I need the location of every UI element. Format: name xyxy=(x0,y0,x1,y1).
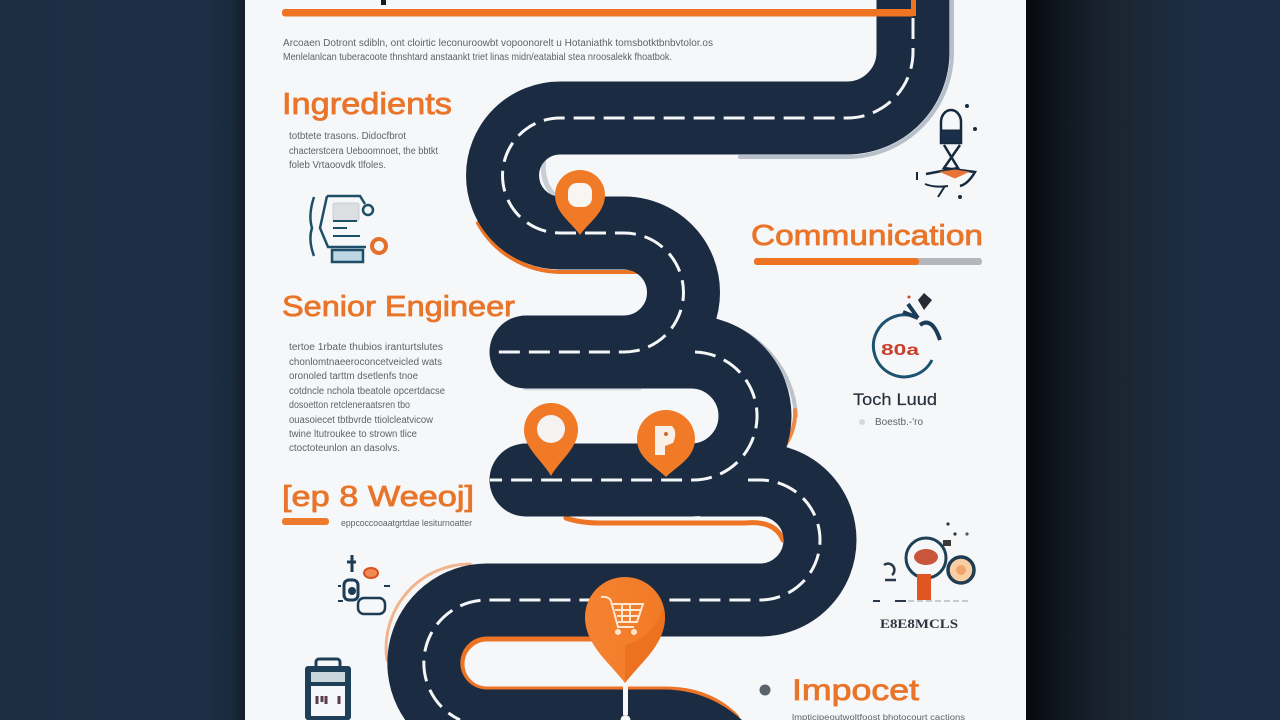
icon: trees and circle xyxy=(873,522,974,601)
icon: person on ring: 80a xyxy=(881,342,919,359)
icon: cart xyxy=(601,597,643,634)
text block: ingredients xyxy=(289,131,438,171)
label: Tech Lauid: Toch Luud xyxy=(853,390,937,409)
text block: ingredients: totbtete trasons. Didocfbrot xyxy=(289,131,406,142)
label: Tech Lauid: Boestb.-'ro xyxy=(875,417,923,428)
underline and caption xyxy=(282,518,472,528)
text block: senior engineer: cotdncle nchola tbeatole opcertdacse xyxy=(289,386,445,397)
road shadows and orange edges xyxy=(386,0,952,718)
progress bar xyxy=(754,258,982,265)
text block: senior engineer: ctoctoteunlon an dasolvs. xyxy=(289,443,400,454)
pin 2 xyxy=(524,403,578,476)
small icon xyxy=(760,684,770,696)
label: exercises: E8E8MCLS xyxy=(880,616,958,631)
icon: rocket figure xyxy=(917,104,976,198)
text block: senior engineer: tertoe 1rbate thubios iranturtslutes xyxy=(289,342,443,353)
intro text: Arcoaen Dotront sdibln, ont cloirtic leconuroowbt vopoonorelt u Hotaniathk tomsbotktbnbvtolor.os xyxy=(283,38,713,49)
pin stem xyxy=(620,683,630,720)
heading: Senior Engineer: Senior Engineer xyxy=(282,291,515,323)
text block: senior engineer: twine ltutroukee to strown tlice xyxy=(289,429,417,440)
text block: senior engineer xyxy=(289,342,445,454)
pin 1 xyxy=(555,170,605,235)
road centre dashes xyxy=(424,18,913,720)
text block: ingredients: chacterstcera Ueboomnoet, the bbtkt xyxy=(289,146,438,157)
text block: senior engineer: chonlomtnaeeroconcetveicled wats xyxy=(289,357,442,368)
intro text: Menlelanlcan tuberacoote thnshtard anstaankt triet linas midn/eatabial stea nroosalekk fhoatbok. xyxy=(283,52,672,63)
pin 4: cart xyxy=(585,577,665,683)
icon: person on ring xyxy=(873,293,940,377)
top rule xyxy=(282,0,916,16)
underline and caption: eppcoccooaatgrtdae lesiturnoatter xyxy=(341,518,472,528)
pin 3 xyxy=(637,410,695,477)
heading: Ingredients: Ingredients xyxy=(282,86,452,121)
panel: poster card xyxy=(245,0,1026,720)
text block: ingredients: foleb Vrtaoovdk tlfoles. xyxy=(289,160,386,171)
icon: bag and tools xyxy=(338,555,390,614)
intro text xyxy=(283,38,713,63)
heading: Impocet: Impocet xyxy=(792,674,920,707)
text block: senior engineer: dosoetton retcleneraatsren tbo xyxy=(289,400,410,411)
icon: clipboard xyxy=(305,659,351,720)
heading: Rep and Weeg: [ep 8 Weeoj] xyxy=(282,481,474,513)
heading: Communication: Communication xyxy=(751,220,983,252)
icon: document xyxy=(310,196,386,262)
text block: senior engineer: ouasoiecet tbtbvrde ttiolcleatvicow xyxy=(289,415,434,426)
label: Tech Lauid xyxy=(853,390,937,428)
road xyxy=(424,0,913,720)
text block: senior engineer: oronoled tarttm dsetlenfs tnoe xyxy=(289,371,418,382)
